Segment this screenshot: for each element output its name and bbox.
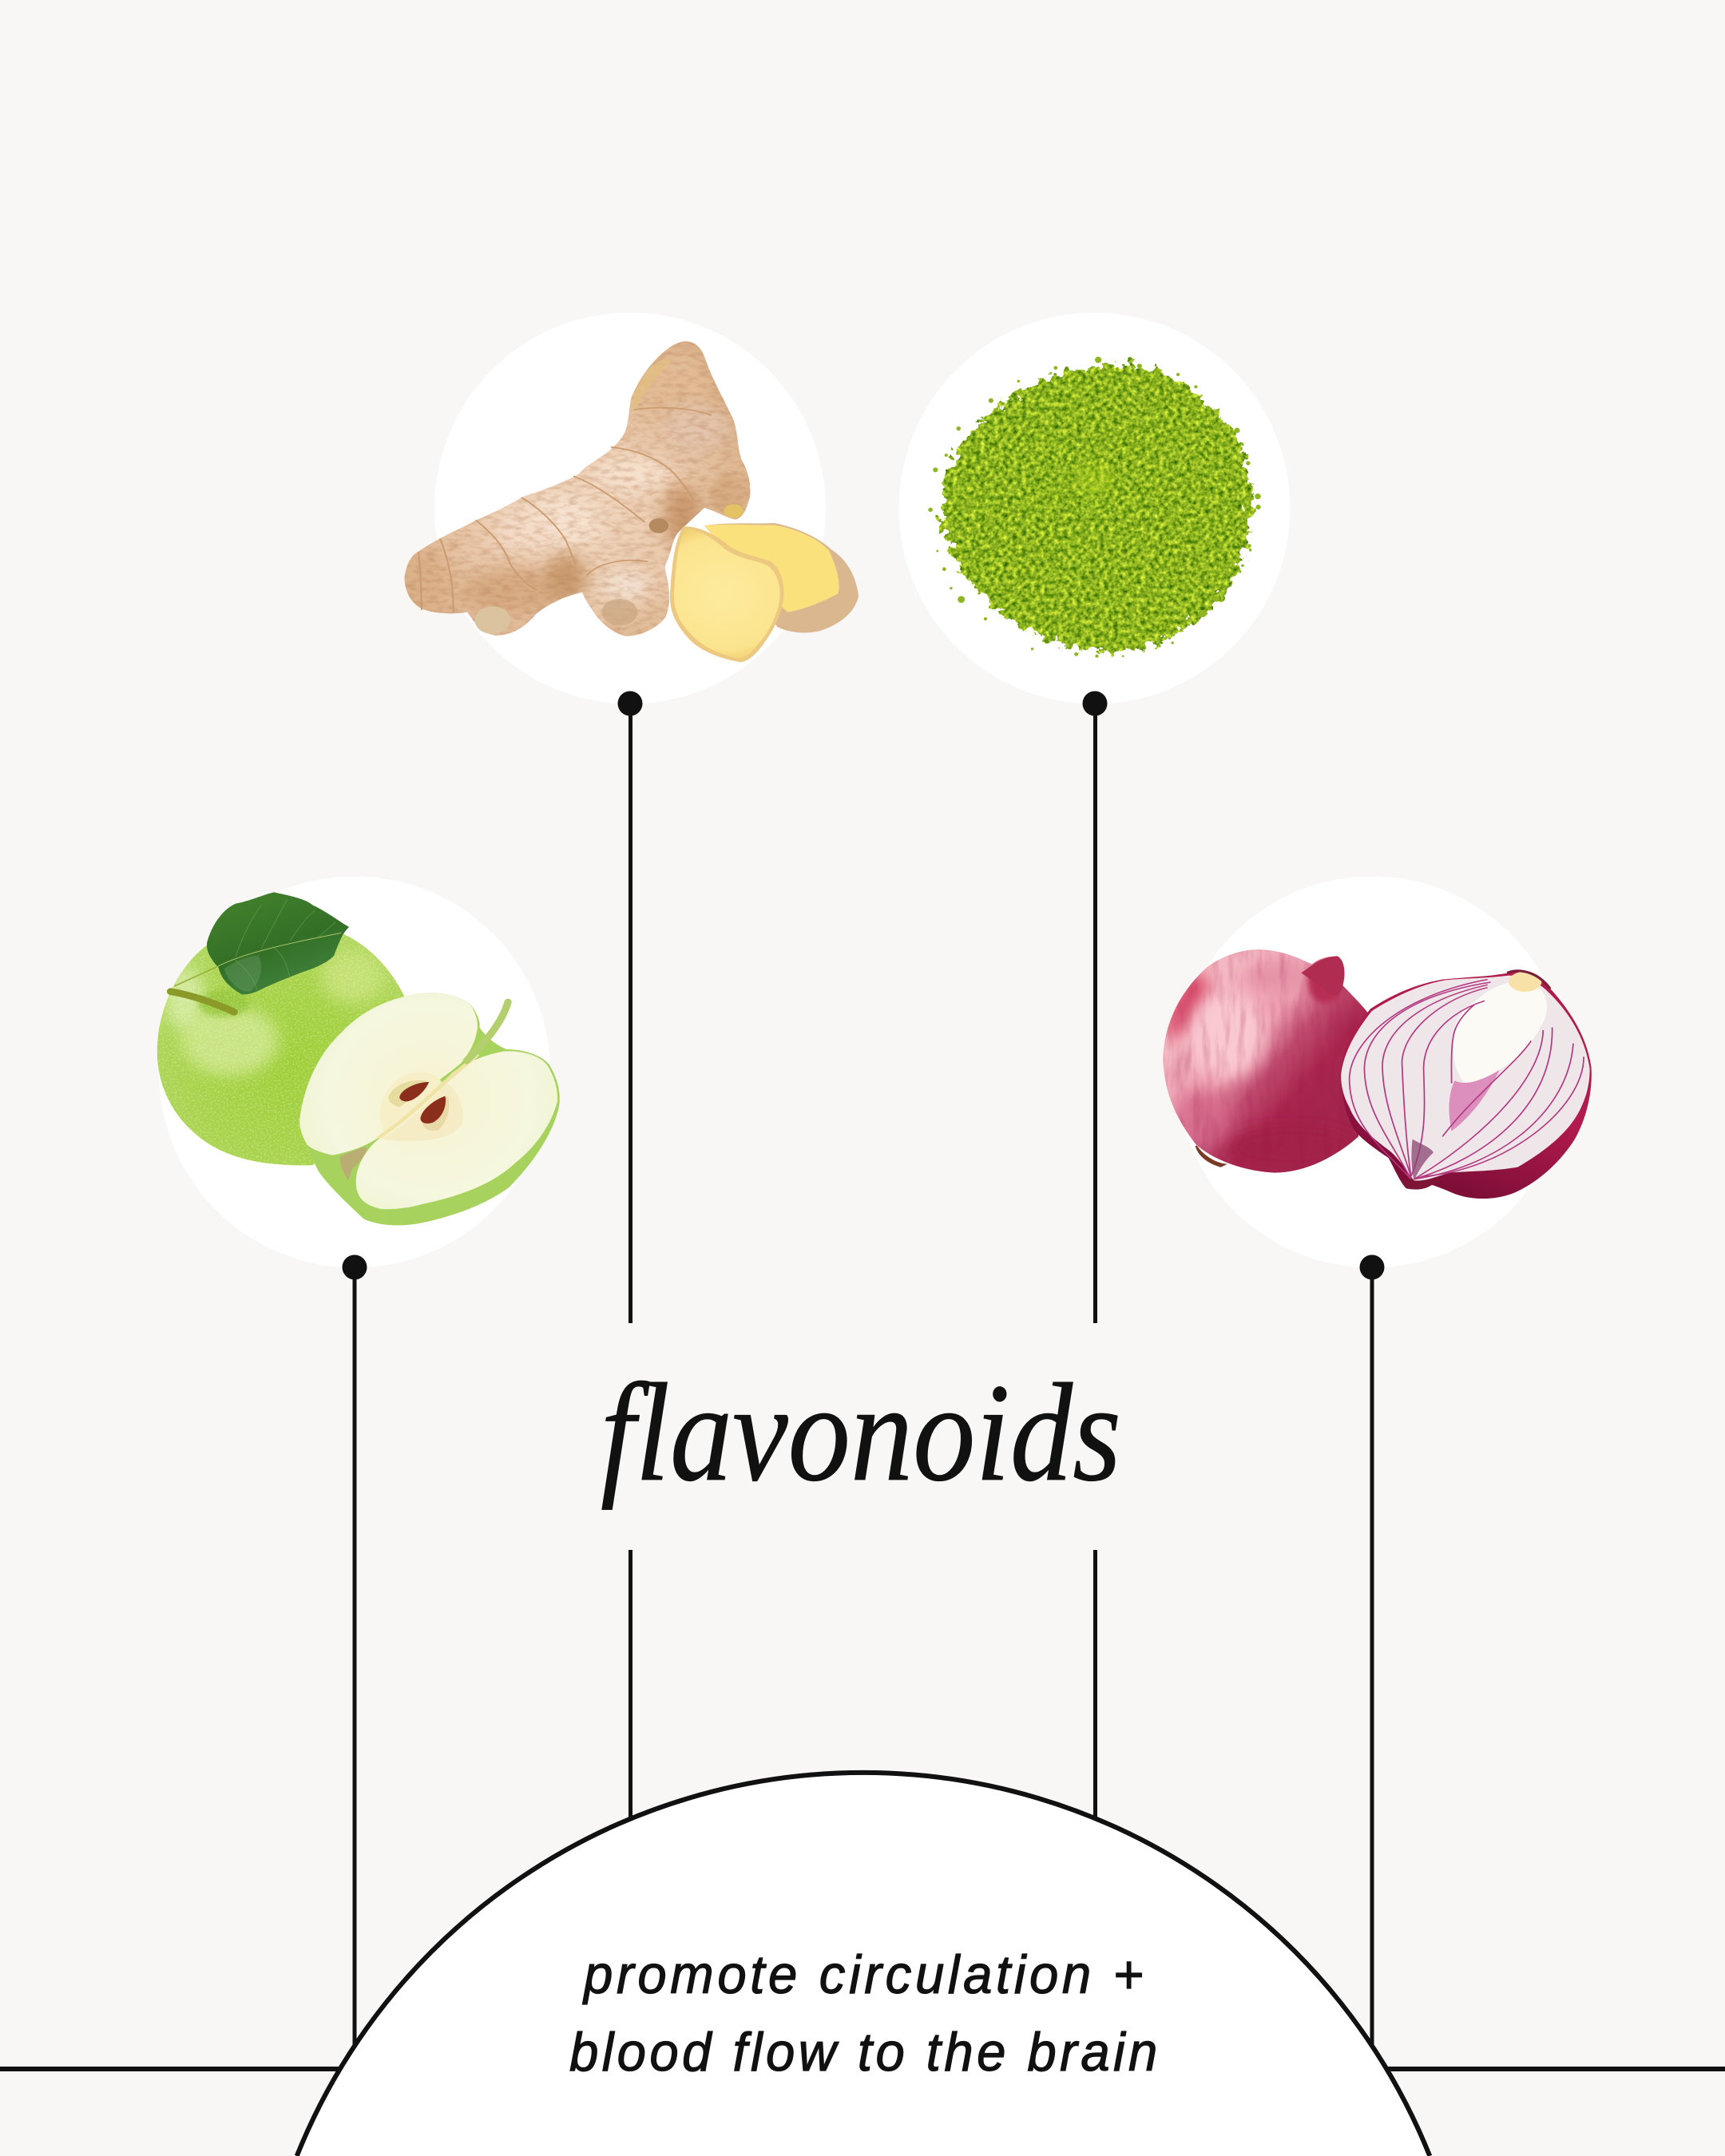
apple cut half: [299, 993, 560, 1225]
benefit text: blood flow to the brain: [569, 2023, 1157, 2083]
matcha connector dot: [1083, 692, 1107, 715]
onion half: [1340, 971, 1592, 1199]
onion neck: [1301, 956, 1344, 996]
ginger connector dot: [618, 692, 642, 715]
onion inner white core: [1453, 981, 1547, 1084]
onion rings: [1350, 980, 1584, 1179]
front ginger slice: [670, 526, 784, 662]
apple core: [380, 1072, 442, 1134]
panel: red onion: [1157, 877, 1592, 1279]
onion backing circle: [1176, 877, 1568, 1268]
onion connector dot: [1359, 1255, 1385, 1279]
icon: red onion with cut half: [1157, 945, 1592, 1199]
onion pink inner heart: [1449, 1070, 1500, 1132]
icon: matcha powder pile: [928, 357, 1261, 658]
dome arc: [297, 1773, 1430, 2156]
apple stem: [171, 992, 234, 1012]
benefit dome: [297, 1773, 1430, 2156]
ginger backing circle: [434, 313, 826, 704]
icon: green apple with cut half: [150, 892, 560, 1225]
onion root: [1196, 1146, 1224, 1167]
panel: green apple: [150, 877, 560, 1279]
apple core line: [379, 1054, 478, 1138]
ginger ridges: [418, 408, 711, 612]
cut apple stem: [466, 1002, 508, 1060]
panel: ginger: [402, 313, 859, 715]
apple leaf: [207, 892, 349, 994]
matcha backing circle: [899, 313, 1291, 704]
baseline rule: [0, 2067, 1725, 2071]
icon: ginger root with slices: [402, 325, 859, 662]
matcha scattered specks: [928, 357, 1261, 658]
apple seeds: [399, 1082, 429, 1101]
panel: matcha: [899, 313, 1291, 715]
connector lines: [355, 703, 1372, 2076]
apple connector dot: [342, 1255, 367, 1279]
apple backing circle: [159, 877, 550, 1268]
benefit text: [569, 1945, 1157, 2083]
back ginger slice: [704, 523, 859, 632]
apple calyx: [339, 1147, 367, 1180]
title: flavonoids: flavonoids: [601, 1355, 1121, 1511]
benefit text: promote circulation +: [582, 1945, 1144, 2005]
